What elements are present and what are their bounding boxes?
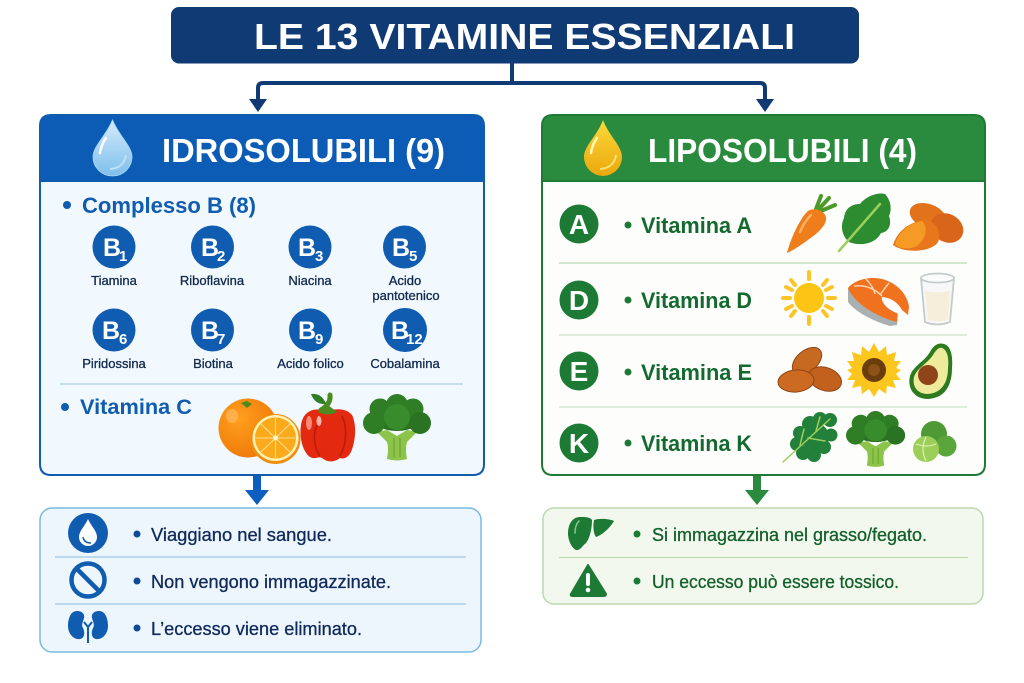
icon: broccoli — [846, 411, 905, 467]
heading: idrosolubili: IDROSOLUBILI (9) — [162, 132, 445, 169]
heading: liposolubili: LIPOSOLUBILI (4) — [648, 132, 917, 169]
badge: B6 piridossina: 6 — [119, 331, 127, 348]
title: LE 13 VITAMINE ESSENZIALI — [254, 16, 795, 57]
badge: B1 tiamina: B — [103, 234, 121, 262]
row: vitamina D: D — [569, 285, 589, 316]
heading: complesso B: Complesso B (8) — [82, 193, 256, 218]
text: eccesso tossico: Un eccesso può essere tossico. — [652, 572, 899, 592]
icon: kale — [783, 412, 838, 462]
badge: B5 acido pantotenico: B — [392, 234, 410, 262]
row: vitamina A: Vitamina A — [641, 213, 752, 238]
badge: B2 riboflavina: 2 — [217, 248, 225, 265]
icon: sunflower — [847, 343, 901, 397]
icon: broccoli — [363, 394, 431, 460]
arrow: liposolubili to properties — [745, 476, 769, 505]
icon: liver — [568, 517, 614, 550]
panel: idrosolubili properties — [40, 508, 481, 652]
badge: B7 biotina: Biotina — [193, 356, 234, 371]
icon: avocado — [909, 343, 952, 399]
badge: B5 acido pantotenico: Acido — [389, 273, 421, 288]
badge: B6 piridossina — [82, 308, 147, 371]
badge: B9 acido folico: Acido folico — [277, 356, 344, 371]
row: vitamina D: Vitamina D — [641, 288, 752, 313]
text: eccesso eliminato: L’eccesso viene eliminato. — [151, 619, 362, 639]
icon: salmon — [848, 278, 909, 326]
panel: liposolubili properties — [543, 508, 983, 604]
icon: brussels sprouts — [913, 421, 956, 462]
arrow: connector from title to both categories — [249, 63, 774, 112]
badge: B3 niacina: Niacina — [288, 273, 332, 288]
badge: B12 cobalamina: Cobalamina — [370, 356, 440, 371]
badge: B1 tiamina — [91, 226, 138, 288]
badge: B1 tiamina: Tiamina — [91, 273, 138, 288]
icon: water drop — [93, 120, 132, 176]
icon: red pepper — [300, 394, 355, 461]
badge: B2 riboflavina: Riboflavina — [180, 273, 245, 288]
badge: B12 cobalamina: B — [391, 317, 409, 345]
text: non vengono immagazzinate: Non vengono immagazzinate. — [151, 572, 391, 592]
badge: B9 acido folico: B — [298, 317, 316, 345]
panel: liposolubili — [542, 115, 985, 475]
badge: B7 biotina — [191, 308, 234, 371]
row: vitamina D — [560, 280, 752, 320]
icon: spinach — [839, 193, 891, 251]
text: viaggiano nel sangue: Viaggiano nel sangue. — [151, 525, 332, 545]
text: si immagazzina: Si immagazzina nel grasso/fegato. — [652, 525, 927, 545]
icon: almonds — [777, 342, 845, 396]
badge: B9 acido folico — [277, 308, 344, 371]
heading: vitamina C: Vitamina C — [80, 396, 192, 419]
badge: B3 niacina: B — [298, 234, 316, 262]
row: vitamina K — [560, 424, 752, 462]
badge: B5 acido pantotenico — [372, 226, 440, 303]
icon: warning triangle — [571, 565, 606, 596]
row: vitamina A — [560, 204, 752, 244]
icon: oil drop — [584, 120, 622, 176]
row: vitamina E: Vitamina E — [641, 360, 752, 385]
badge: B6 piridossina: Piridossina — [82, 356, 147, 371]
badge: B1 tiamina: 1 — [119, 248, 127, 265]
badge: B5 acido pantotenico: 5 — [409, 248, 417, 265]
panel: idrosolubili — [40, 115, 484, 475]
row: vitamina A: A — [569, 209, 589, 240]
arrow: idrosolubili to properties — [245, 476, 269, 505]
badge: B5 acido pantotenico: pantotenico — [372, 288, 440, 303]
row: vitamina K: K — [569, 428, 589, 459]
icon: carrot — [787, 196, 835, 253]
badge: B9 acido folico: 9 — [315, 331, 323, 348]
row: vitamina E — [560, 352, 752, 390]
icon: sweet potato — [893, 198, 969, 251]
icon: kidneys — [68, 611, 108, 643]
title — [171, 7, 859, 64]
badge: B7 biotina: 7 — [217, 331, 225, 348]
icon: sun — [783, 272, 835, 324]
badge: B12 cobalamina: 12 — [406, 331, 423, 348]
icon: glass of milk — [921, 274, 954, 324]
badge: B2 riboflavina — [180, 226, 245, 288]
icon: blood drop — [68, 513, 108, 553]
badge: B7 biotina: B — [201, 317, 219, 345]
icon: orange — [218, 398, 300, 464]
row: vitamina K: Vitamina K — [641, 431, 752, 456]
badge: B3 niacina: 3 — [315, 248, 323, 265]
icon: prohibited sign — [72, 564, 104, 596]
badge: B2 riboflavina: B — [201, 234, 219, 262]
badge: B6 piridossina: B — [102, 317, 120, 345]
badge: B3 niacina — [288, 226, 332, 288]
row: vitamina E: E — [570, 356, 588, 387]
badge: B12 cobalamina — [370, 308, 440, 371]
